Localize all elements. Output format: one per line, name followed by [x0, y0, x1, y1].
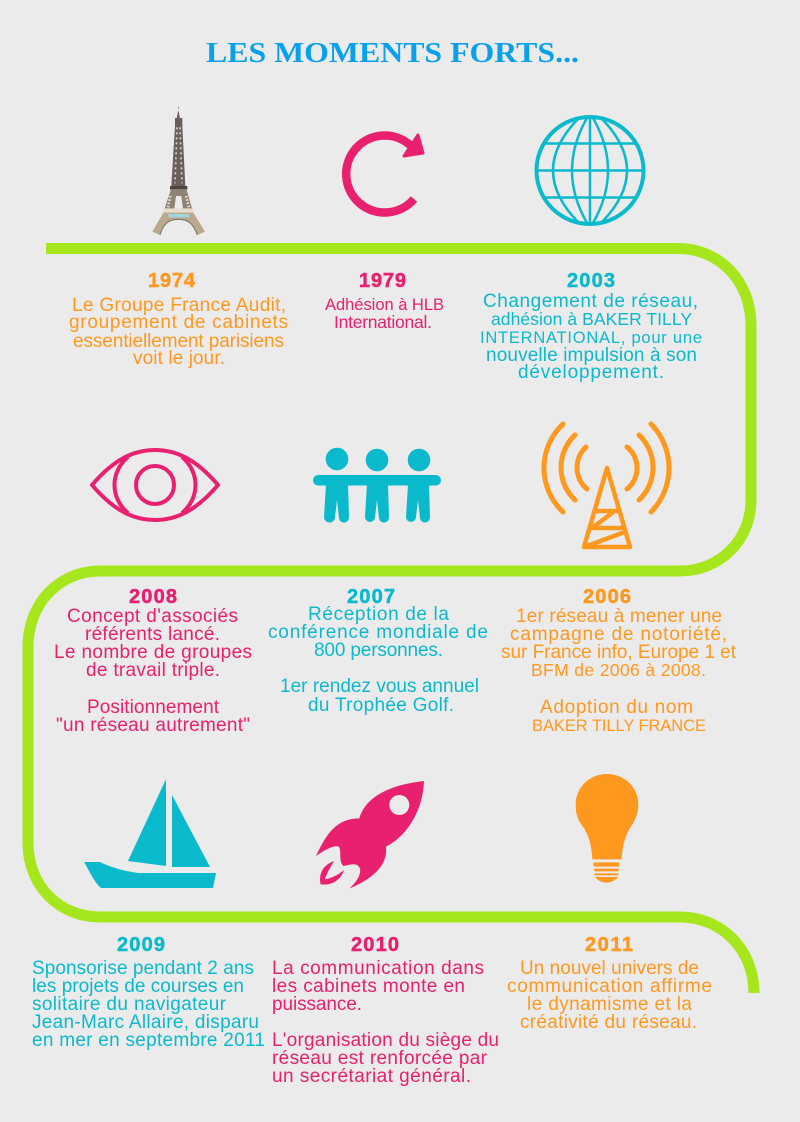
text: 2010: réseau est renforcée par: [272, 1048, 488, 1069]
text: 2009: les projets de courses en: [32, 976, 244, 997]
icon: eye: [92, 450, 218, 520]
text: 2008: Concept d'associés: [67, 606, 238, 627]
text: 2007: 800 personnes.: [314, 640, 443, 661]
text: 2008: de travail triple.: [86, 660, 220, 681]
text: 2011: créativité du réseau.: [520, 1012, 697, 1033]
text: 2011: communication affirme: [507, 976, 712, 997]
text: 2010: un secrétariat général.: [272, 1066, 471, 1087]
text: 2006: campagne de notoriété,: [510, 624, 727, 645]
text: 2007: 2007: [347, 586, 395, 608]
text: 2003: [480, 270, 702, 383]
text: 2003: 2003: [567, 270, 615, 292]
text: 2010: La communication dans: [272, 958, 484, 979]
text: 2009: solitaire du navigateur: [32, 994, 227, 1015]
timeline path: [28, 248, 754, 993]
icon: globe: [536, 117, 644, 224]
text: 2009: en mer en septembre 2011: [32, 1030, 265, 1051]
text: 2008: Positionnement: [87, 697, 220, 718]
text: 2009: Jean-Marc Allaire, disparu: [32, 1012, 259, 1033]
text: 2008: "un réseau autrement": [56, 715, 250, 736]
text: 2011: le dynamisme et la: [527, 994, 692, 1015]
text: 1974: [69, 270, 288, 369]
text: 2009: [32, 934, 265, 1051]
icon: light bulb: [576, 774, 638, 883]
text: 1974: voit le jour.: [133, 348, 225, 369]
text: 2010: 2010: [351, 934, 399, 956]
icon: refresh arrow: [346, 135, 423, 213]
text: 2008: référents lancé.: [85, 624, 220, 645]
text: 2010: L'organisation du siège du: [272, 1030, 499, 1051]
text: 2006: 2006: [583, 586, 631, 608]
text: 2008: Le nombre de groupes: [54, 642, 252, 663]
text: 2009: 2009: [117, 934, 165, 956]
text: 2010: puissance.: [272, 994, 362, 1015]
icon: Eiffel tower: [152, 107, 205, 235]
text: 2003: développement.: [518, 362, 664, 383]
icon: three people: [313, 448, 441, 523]
icon: sailboat: [84, 779, 216, 888]
text: 1979: Adhésion à HLB: [325, 296, 444, 314]
text: 2008: 2008: [129, 586, 177, 608]
text: 2008: [54, 586, 252, 736]
text: 1979: [325, 270, 444, 332]
icon: rocket: [316, 781, 424, 889]
text: 2003: nouvelle impulsion à son: [486, 345, 697, 366]
text: 2006: 1er réseau à mener une: [516, 606, 722, 627]
icon: radio tower: [544, 424, 669, 547]
text: 2011: [507, 934, 712, 1033]
text: 2011: 2011: [585, 934, 633, 956]
text: 1974: essentiellement parisiens: [73, 331, 284, 352]
text: 2007: [268, 586, 488, 716]
text: 2003: INTERNATIONAL, pour une: [480, 329, 702, 347]
text: 1974: Le Groupe France Audit,: [72, 295, 286, 316]
text: 2006: sur France info, Europe 1 et: [501, 642, 737, 663]
text: 2009: Sponsorise pendant 2 ans: [32, 958, 254, 979]
text: 2003: Changement de réseau,: [483, 291, 698, 312]
text: 1979: International.: [334, 312, 432, 332]
text: 1979: 1979: [359, 270, 406, 292]
text: 2006: Adoption du nom: [540, 697, 693, 718]
text: 2006: BFM de 2006 à 2008.: [531, 660, 706, 680]
text: 2006: [501, 586, 737, 735]
text: 2007: Réception de la: [308, 604, 449, 625]
text: 2010: les cabinets monte en: [272, 976, 465, 997]
text: 2011: Un nouvel univers de: [520, 958, 699, 979]
title: LES MOMENTS FORTS...: [206, 37, 579, 69]
text: 2007: du Trophée Golf.: [308, 695, 454, 716]
text: 1974: 1974: [148, 270, 196, 292]
text: 2010: [272, 934, 499, 1087]
text: 2007: 1er rendez vous annuel: [280, 676, 479, 697]
text: 2003: adhésion à BAKER TILLY: [491, 309, 692, 329]
text: 1974: groupement de cabinets: [69, 312, 288, 333]
text: 2006: BAKER TILLY FRANCE: [532, 717, 706, 735]
text: 2007: conférence mondiale de: [268, 622, 488, 643]
